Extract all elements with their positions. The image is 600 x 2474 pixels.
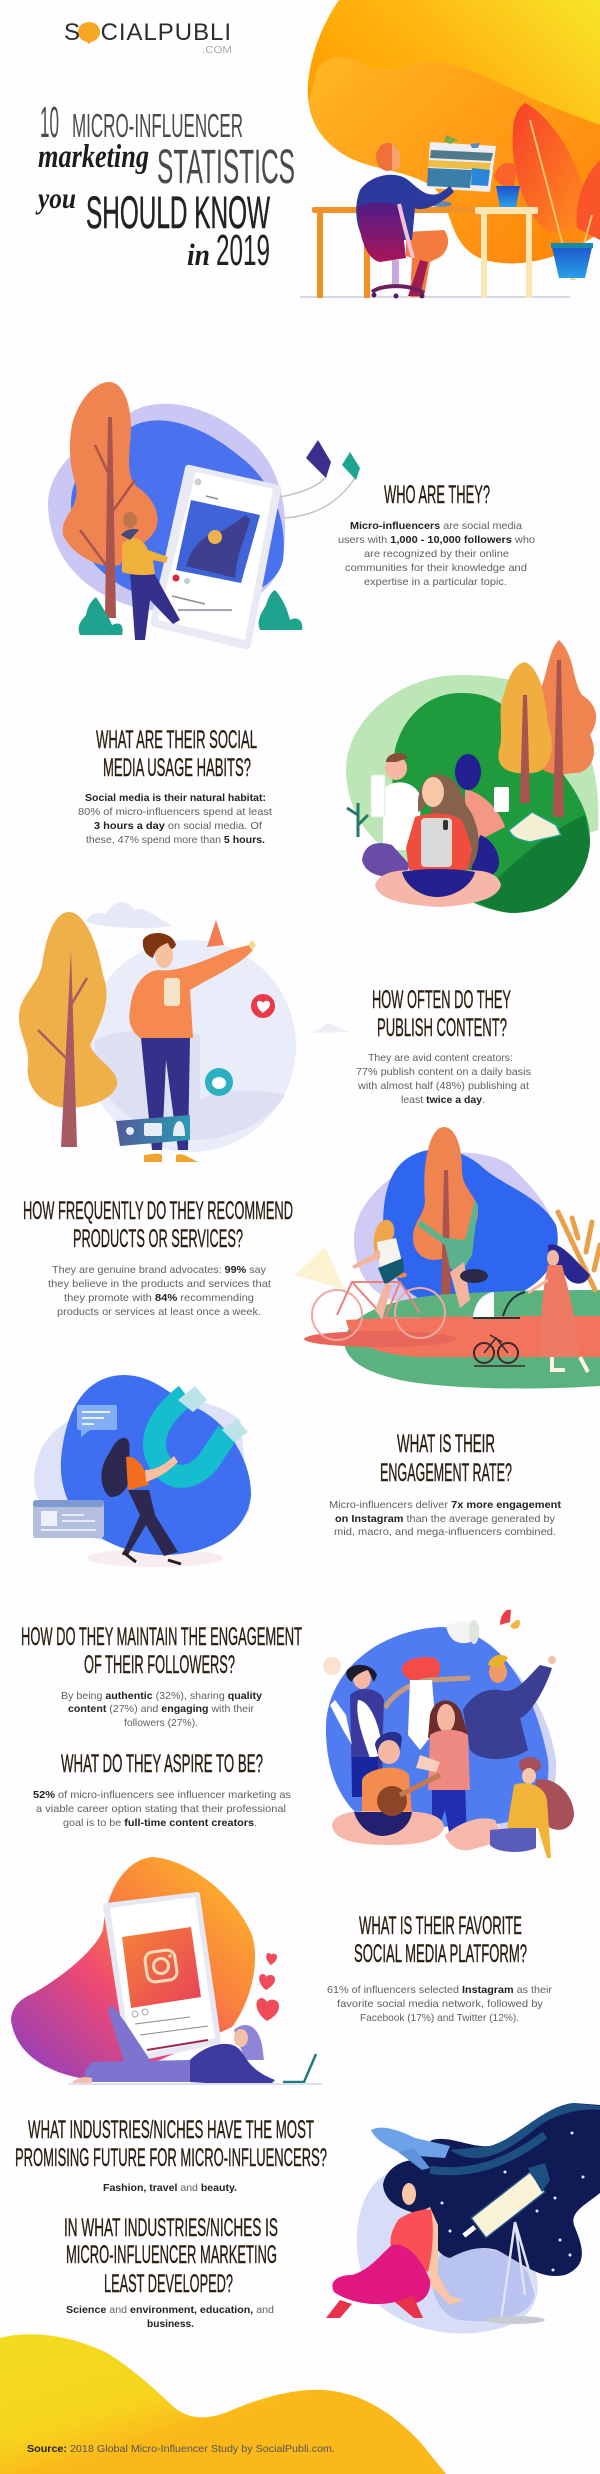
heading: promising industries bbox=[15, 2116, 327, 2172]
heading bbox=[372, 986, 511, 1042]
headlight glow bbox=[295, 1247, 345, 1290]
bushes bbox=[79, 590, 302, 635]
illustration: park scene bbox=[295, 1127, 600, 1388]
icon: like badge bbox=[205, 1068, 233, 1096]
body text: they believe in the products and services that bbox=[48, 1278, 271, 1290]
gradient blob bbox=[11, 1857, 255, 2078]
boy with guitar bbox=[332, 1732, 444, 1845]
title: 10 bbox=[40, 98, 59, 147]
person with kite bbox=[121, 512, 180, 640]
floor line bbox=[68, 2083, 322, 2085]
body text: with almost half (48%) publishing at bbox=[357, 1080, 529, 1092]
wheat bbox=[558, 1212, 600, 1290]
headstand person bbox=[418, 1200, 488, 1308]
kite strings bbox=[232, 478, 355, 518]
heading: MEDIA USAGE HABITS? bbox=[103, 754, 251, 782]
body text bbox=[338, 520, 535, 588]
logo: SOCIALPUBLI bbox=[64, 19, 232, 46]
cloud bbox=[86, 902, 172, 928]
heading: least developed bbox=[64, 2214, 278, 2298]
stroller bbox=[473, 1292, 525, 1318]
body text bbox=[48, 1264, 271, 1318]
title bbox=[35, 98, 295, 275]
panel: favorite platform bbox=[11, 1857, 553, 2084]
plane trail bbox=[450, 2103, 600, 2158]
body text: They are genuine brand advocates: 99% say bbox=[52, 1264, 267, 1276]
book bbox=[509, 812, 561, 842]
illustration: group of friends bbox=[323, 1610, 574, 1858]
blue blob bbox=[383, 1149, 558, 1306]
girl right bbox=[455, 754, 509, 878]
tripod shadow bbox=[485, 2316, 545, 2324]
body text: products or services at least once a week. bbox=[57, 1306, 261, 1318]
title: marketing bbox=[38, 139, 149, 175]
heading: least developed: LEAST DEVELOPED? bbox=[104, 2270, 233, 2298]
phone bbox=[151, 465, 281, 649]
balloon white bbox=[446, 1622, 480, 1643]
lavender circle bbox=[84, 940, 296, 1152]
lavender inner blob bbox=[432, 2247, 535, 2321]
heading: aspirations: WHAT DO THEY ASPIRE TO BE? bbox=[61, 1750, 263, 1778]
lavender blob bbox=[48, 404, 285, 613]
body text bbox=[329, 1499, 562, 1538]
trees bbox=[498, 640, 596, 817]
heading: WHO ARE THEY? bbox=[384, 481, 490, 509]
logo: .COM bbox=[202, 45, 232, 56]
woman walking bbox=[528, 1244, 590, 1372]
laptop bbox=[283, 2054, 316, 2082]
light green blob bbox=[346, 675, 598, 871]
body text: these, 47% spend more than 5 hours. bbox=[86, 834, 265, 846]
heading: maintain engagement: OF THEIR FOLLOWERS? bbox=[84, 1651, 235, 1679]
body text: aspirations: goal is to be full-time content creators . bbox=[63, 1817, 257, 1829]
body text: aspirations: 52% of micro-influencers see influencer marketing as bbox=[33, 1789, 291, 1801]
floor shadow bbox=[87, 1549, 223, 1567]
lavender outer blob bbox=[357, 2169, 538, 2333]
ground bbox=[344, 1290, 600, 1388]
panel: industries bbox=[15, 2103, 600, 2333]
source note: Source: 2018 Global Micro-Influencer Study by SocialPubli.com. bbox=[27, 2443, 335, 2455]
body text: 80% of micro-influencers spend at least bbox=[78, 806, 272, 818]
body text: they promote with 84% recommending bbox=[64, 1292, 254, 1304]
illustration: girl with magnet bbox=[33, 1375, 251, 1567]
illustration: instagram phone bbox=[11, 1857, 322, 2084]
cyclist bbox=[312, 1220, 445, 1340]
body text: Social media is their natural habitat: bbox=[85, 792, 266, 804]
body text: least developed: Science and environment, education, and bbox=[66, 2304, 274, 2316]
plant large leaves bbox=[494, 103, 600, 280]
body text: Facebook (17%) and Twitter (12%). bbox=[360, 2012, 519, 2024]
wooden branch bbox=[385, 1678, 470, 1708]
heading: maintain engagement bbox=[21, 1623, 302, 1679]
blue blob bbox=[61, 1375, 251, 1555]
person with hoodie bbox=[330, 1665, 385, 1797]
illustration: friends with phones bbox=[346, 640, 598, 913]
title: MICRO-INFLUENCER bbox=[72, 107, 243, 144]
bike shadow bbox=[304, 1331, 456, 1347]
seated person bbox=[356, 143, 454, 298]
lavender edge bbox=[430, 1630, 556, 1830]
girl center with tablet bbox=[375, 774, 501, 907]
tree bbox=[19, 912, 117, 1147]
body text: Micro-influencers deliver 7x more engagement bbox=[329, 1499, 562, 1511]
kites bbox=[306, 440, 360, 480]
heading: WHAT IS THEIR bbox=[397, 1430, 495, 1458]
girl seated right bbox=[445, 1757, 574, 1858]
lavender blob bbox=[354, 1153, 556, 1306]
heading bbox=[96, 726, 257, 782]
tree bbox=[413, 1127, 478, 1297]
hill bbox=[95, 1030, 200, 1136]
heading bbox=[354, 1912, 527, 1968]
man bbox=[129, 933, 256, 1162]
body text: Micro-influencers are social media bbox=[350, 520, 522, 532]
title: SHOULD KNOW bbox=[86, 187, 270, 238]
title: 2019 bbox=[216, 226, 270, 275]
body text: least developed: business. bbox=[147, 2318, 194, 2330]
heading: PRODUCTS OR SERVICES? bbox=[73, 1225, 243, 1253]
body text: promising industries: Fashion, travel and beauty. bbox=[103, 2182, 237, 2194]
phone bbox=[103, 1892, 221, 2063]
body text: maintain engagement: content (27%) and engaging with their bbox=[68, 1703, 255, 1715]
icon: instagram logo bbox=[144, 1949, 178, 1983]
girl bbox=[101, 1438, 181, 1564]
icon: heart badge bbox=[251, 994, 275, 1018]
panel: footer bbox=[0, 2334, 446, 2474]
hero blob inner wave bbox=[309, 57, 600, 263]
speech bubble bbox=[77, 1405, 117, 1437]
body text: aspirations: a viable career option stating that their professional bbox=[36, 1803, 286, 1815]
plant bbox=[347, 803, 368, 837]
heading bbox=[23, 1197, 293, 1253]
panel: recommend products bbox=[23, 1127, 600, 1388]
red balloon bbox=[402, 1657, 440, 1680]
body text: 77% publish content on a daily basis bbox=[356, 1066, 531, 1078]
panel: publish content bbox=[19, 902, 531, 1162]
plane bbox=[371, 2128, 450, 2170]
title: in bbox=[187, 237, 210, 272]
panel: maintain engagement and aspirations bbox=[21, 1610, 574, 1858]
panel: engagement rate bbox=[33, 1375, 562, 1567]
body text: least developed bbox=[66, 2304, 274, 2330]
body text: maintain engagement bbox=[61, 1690, 262, 1729]
title: you bbox=[35, 182, 76, 215]
tree bbox=[63, 382, 158, 618]
body text: aspirations bbox=[33, 1789, 291, 1829]
icon: notification bar bbox=[116, 1115, 190, 1146]
heading: promising industries: PROMISING FUTURE FOR MICRO-INFLUENCERS? bbox=[15, 2144, 327, 2172]
lavender blob bbox=[34, 1400, 250, 1545]
monitor bbox=[427, 135, 496, 192]
panel: social media usage bbox=[78, 640, 598, 913]
balloon peach bbox=[323, 1657, 341, 1675]
woman with long hair bbox=[416, 1700, 470, 1790]
telescope bbox=[462, 2163, 550, 2320]
boy bbox=[362, 753, 421, 877]
body text: communities for their knowledge and bbox=[345, 562, 527, 574]
hero background blob bbox=[308, 0, 600, 263]
heading: WHAT ARE THEIR SOCIAL bbox=[96, 726, 257, 754]
body text: favorite social media network, followed by bbox=[337, 1998, 544, 2010]
body text: They are avid content creators: bbox=[368, 1052, 513, 1064]
blue blob bbox=[326, 1627, 548, 1830]
panel: header bbox=[35, 0, 600, 298]
heading: maintain engagement: HOW DO THEY MAINTAIN THE ENGAGEMENT bbox=[21, 1623, 302, 1651]
body text: 61% of influencers selected Instagram as their bbox=[327, 1984, 553, 1996]
heading: HOW FREQUENTLY DO THEY RECOMMEND bbox=[23, 1197, 293, 1225]
man in hat bbox=[432, 1655, 556, 1838]
heading: promising industries: WHAT INDUSTRIES/NICHES HAVE THE MOST bbox=[28, 2116, 314, 2144]
woman bbox=[326, 2183, 464, 2318]
body text: least twice a day. bbox=[401, 1094, 485, 1106]
icon: butterfly bbox=[500, 1610, 520, 1629]
body text: maintain engagement: followers (27%). bbox=[124, 1717, 198, 1729]
body text: 3 hours a day on social media. Of bbox=[94, 820, 262, 832]
girl lying down bbox=[72, 2005, 275, 2083]
body text: expertise in a particular topic. bbox=[364, 576, 507, 588]
dark green blob bbox=[392, 693, 590, 913]
body text bbox=[356, 1052, 531, 1106]
hearts bbox=[256, 1953, 279, 2021]
info card bbox=[33, 1500, 104, 1538]
blue blob bbox=[71, 420, 284, 603]
heading: least developed: MICRO-INFLUENCER MARKETING bbox=[66, 2241, 277, 2269]
body text: maintain engagement: By being authentic (32%), sharing quality bbox=[61, 1690, 262, 1702]
body text: mid, macro, and mega-influencers combined. bbox=[334, 1526, 556, 1538]
heading: least developed: IN WHAT INDUSTRIES/NICHES IS bbox=[64, 2214, 278, 2242]
body text: are recognized by their online bbox=[364, 548, 509, 560]
desk bbox=[312, 207, 538, 298]
body text: on Instagram than the average generated by bbox=[335, 1513, 556, 1525]
illustration: phone and kites bbox=[48, 382, 360, 649]
yellow footer blob bbox=[0, 2334, 446, 2474]
body text: users with 1,000 - 10,000 followers who bbox=[338, 534, 535, 546]
illustration: woman and telescope bbox=[326, 2103, 600, 2333]
body text bbox=[78, 792, 272, 846]
icon: triangle badge bbox=[207, 920, 224, 947]
illustration: man with phone bbox=[19, 902, 350, 1162]
small bike bbox=[474, 1335, 525, 1366]
panel: who are they bbox=[48, 382, 535, 649]
magnet bbox=[154, 1386, 248, 1476]
small cloud bbox=[310, 1024, 350, 1033]
title: STATISTICS bbox=[157, 141, 295, 194]
plant pots bbox=[496, 186, 593, 278]
night sky blob bbox=[383, 2103, 600, 2276]
body text bbox=[327, 1984, 553, 2024]
heading bbox=[380, 1430, 512, 1487]
stars bbox=[440, 2132, 584, 2272]
illustration: person at desk bbox=[300, 103, 600, 298]
